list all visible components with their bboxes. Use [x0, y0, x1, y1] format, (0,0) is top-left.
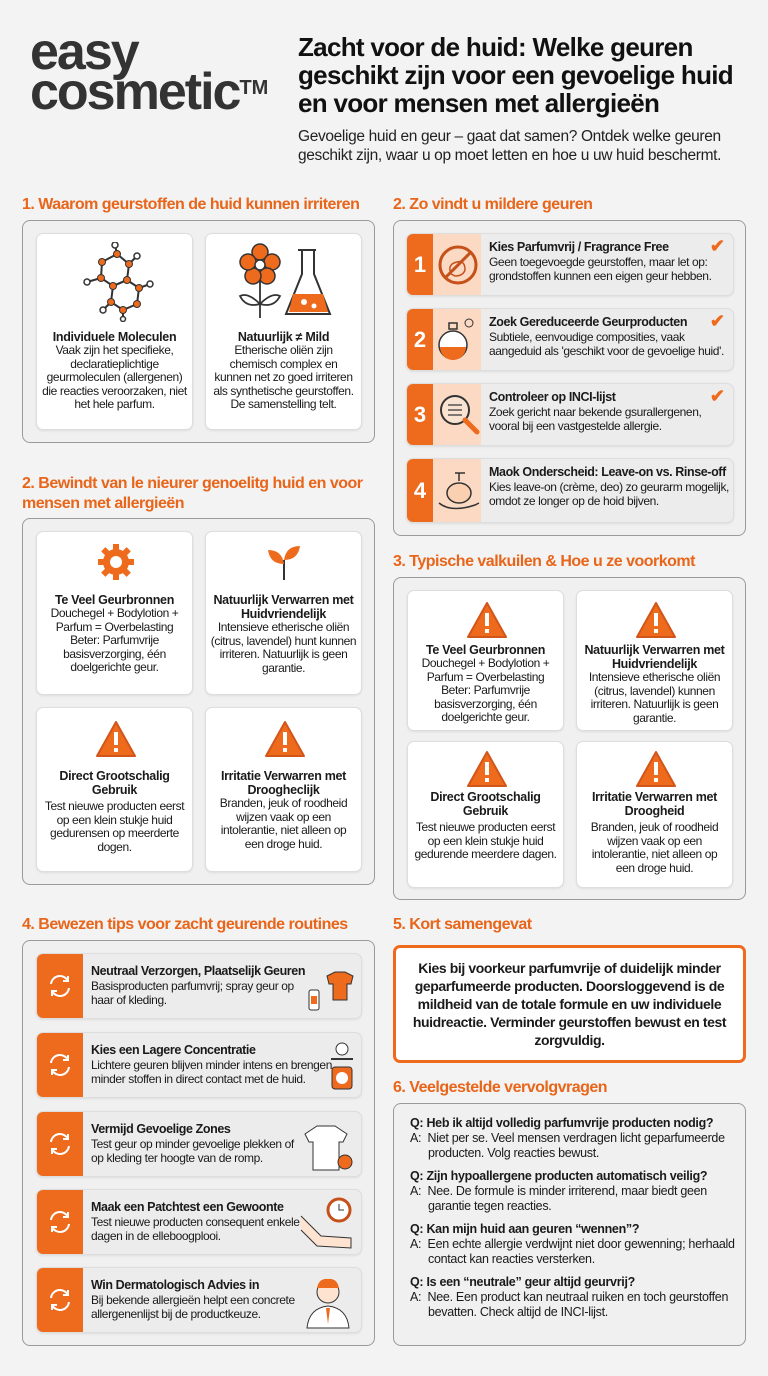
heading: section 3: 3. Typische valkuilen & Hoe u ze voorkomt [393, 553, 695, 570]
tip 2: Lichtere geuren blijven minder intens en brengen minder stoffen in direct contact met de huid. [91, 1058, 332, 1086]
icon: warning [636, 602, 676, 638]
icon: check: ✔ [710, 311, 725, 331]
tip 4: Maak een Patchtest een Gewoonte [91, 1200, 284, 1214]
card: direct use: Direct Grootschalig Gebruik [59, 769, 170, 797]
card: too many sources: Te Veel Geurbronnen [55, 593, 174, 607]
tip 2 [36, 1032, 362, 1098]
tip 3: Vermijd Gevoelige Zones [91, 1122, 230, 1136]
row 3 [406, 383, 734, 446]
icon: doctor [306, 1278, 350, 1328]
faq 3 [410, 1222, 735, 1266]
tip 4 [36, 1189, 362, 1255]
card: direct use: Direct Grootschalig Gebruik [430, 790, 541, 818]
faq 1 [410, 1116, 725, 1160]
icon: warning [467, 602, 507, 638]
row 4 [406, 458, 734, 523]
card: too many sources: Douchegel + Bodylotion + Parfum = Overbelasting Beter: Parfumvrije basisverzorging, één doelgerichte geur. [51, 606, 178, 674]
faq 4 [410, 1275, 728, 1319]
icon: no fragrance [438, 246, 478, 284]
icon: leaves [268, 546, 300, 580]
card: natural confusion: Natuurlijk Verwarren met Huidvriendelijk [584, 643, 725, 671]
heading: section 2 left: 2. Bewindt van le nieurer genoelitg huid en voor mensen met allergieën [22, 475, 362, 512]
heading: section 2 right: 2. Zo vindt u mildere geuren [393, 196, 592, 213]
row 3: 3 [414, 402, 426, 426]
row 4: Kies leave-on (crème, deo) zo geurarm mogelijk, omdot ze longer op de hoid bijven. [489, 480, 729, 508]
card: molecules: Individuele Moleculen [53, 330, 176, 344]
title: Zacht voor de huid: Welke geuren [298, 32, 693, 62]
card: irritation vs dryness: Irritatie Verwarren met Droogheclijk [221, 769, 346, 797]
logo: easy [30, 23, 138, 81]
card: too many sources [407, 590, 564, 731]
icon: shirt and spray [308, 972, 354, 1010]
panel: section 2 left [22, 518, 375, 885]
row 1: 1 [414, 252, 426, 276]
title: en voor mensen met allergieën [298, 88, 659, 118]
card: natural confusion [576, 590, 733, 731]
faq 2 [410, 1169, 707, 1213]
card: natural [205, 233, 362, 430]
card: too many sources: Te Veel Geurbronnen [426, 643, 545, 657]
row 2 [406, 308, 734, 371]
panel: section 3 [393, 577, 746, 900]
row 2: Zoek Gereduceerde Geurproducten [489, 315, 687, 329]
card: too many sources [36, 531, 193, 695]
subtitle: Gevoelige huid en geur – gaat dat samen? Ontdek welke geuren [298, 128, 721, 145]
card: irritation vs dryness [576, 741, 733, 888]
faq 4: A: Nee. Een product kan neutraal ruiken en toch geurstoffen bevatten. Check altijd de INCI-lijst. [410, 1290, 728, 1319]
card: irritation vs dryness: Branden, jeuk of roodheid wijzen vaak op een intolerantie, niet alleen op een droge huid. [591, 820, 718, 874]
card: natural confusion: Intensieve etherische oliën (citrus, lavendel) kunnen irriteren. Natuurlijk is geen garantie. [589, 670, 720, 724]
card: direct use [36, 707, 193, 872]
panel: FAQ [393, 1103, 746, 1346]
row 3: Controleer op INCI-lijst [489, 390, 616, 404]
card: irritation vs dryness: Irritatie Verwarren met Droogheid [592, 790, 717, 818]
faq 3: A: Een echte allergie verdwijnt niet door gewenning; herhaald contact kan reacties versterken. [410, 1237, 735, 1266]
icon: flower and flask [238, 243, 332, 318]
faq 2: Q: Zijn hypoallergene producten automatisch veilig? [410, 1169, 707, 1183]
subtitle [298, 128, 721, 164]
icon: check: ✔ [710, 236, 725, 256]
tip 1 [36, 953, 362, 1019]
card: irritation vs dryness: Branden, jeuk of roodheid wijzen vaak op een intolerantie, niet alleen op een droge huid. [220, 796, 347, 850]
tip 5 [36, 1267, 362, 1333]
faq 4: Q: Is een “neutrale” geur altijd geurvrij? [410, 1275, 635, 1289]
card: natural confusion: Natuurlijk Verwarren met Huidvriendelijk [213, 593, 354, 621]
icon: magnifier [440, 395, 480, 434]
panel: section 1 [22, 220, 375, 443]
heading: section 6: 6. Veelgestelde vervolgvragen [393, 1079, 607, 1096]
row 1 [406, 233, 734, 296]
tip 1: Basisproducten parfumvrij; spray geur op haar of kleding. [91, 979, 294, 1007]
tip 3: Test geur op minder gevoelige plekken of op kleding ter hoogte van de romp. [91, 1137, 294, 1165]
icon: perfume bottle [438, 318, 474, 360]
heading: section 5: 5. Kort samengevat [393, 916, 532, 933]
row 2: Subtiele, eenvoudige composities, vaak aangeduid als 'geschikt voor de gevoelige huid'. [489, 330, 724, 358]
row 1: Geen toegevoegde geurstoffen, maar let op: grondstoffen kunnen een eigen geur hebben. [489, 255, 712, 283]
card: irritation vs dryness [205, 707, 362, 872]
panel: section 4 [22, 940, 375, 1346]
card: natural confusion: Intensieve etherische oliën (citrus, lavendel) hunt kunnen irriteren. Natuurlijk is geen garantie. [211, 620, 356, 674]
row 1: Kies Parfumvrij / Fragrance Free [489, 240, 669, 254]
faq 1: Q: Heb ik altijd volledig parfumvrije producten nodig? [410, 1116, 713, 1130]
card: molecules: Vaak zijn het specifieke, declaratieplichtige geurmoleculen (allergenen) die reacties veroorzaken, niet het hele parfum. [42, 343, 187, 411]
logo [30, 23, 268, 121]
card: natural confusion [205, 531, 362, 695]
faq 2: A: Nee. De formule is minder irriterend, maar biedt geen garantie tegen reacties. [410, 1184, 707, 1213]
icon: scale [331, 1042, 353, 1090]
icon: arm and clock [300, 1198, 352, 1248]
icon: hand with pump [438, 472, 480, 510]
icon: warning [96, 721, 136, 757]
card: direct use: Test nieuwe producten eerst op een klein stukje huid gedurende meerdere dagen. [414, 820, 557, 861]
row 4: 4 [414, 478, 426, 502]
faq 1: A: Niet per se. Veel mensen verdragen licht geparfumeerde producten. Volg reacties bewust. [410, 1131, 725, 1160]
card: natural: Etherische oliën zijn chemisch complex en kunnen net zo goed irriteren als synthetische geurstoffen. De samenstelling telt. [213, 343, 354, 411]
heading: section 4: 4. Bewezen tips voor zacht geurende routines [22, 916, 348, 933]
row 3: Zoek gericht naar bekende gsurallergenen, vooral bij een vastgestelde allergie. [489, 405, 701, 433]
card: molecules [36, 233, 193, 430]
row 4: Maok Onderscheid: Leave-on vs. Rinse-off [489, 465, 726, 479]
icon: warning [467, 751, 507, 787]
tip 5: Bij bekende allergieën helpt een concrete allergenenlijst bij de productkeuze. [91, 1293, 295, 1321]
icon: tshirt and bottle [304, 1126, 352, 1170]
logo: cosmeticTM [30, 63, 268, 121]
summary box: Kies bij voorkeur parfumvrije of duidelijk minder geparfumeerde producten. Doorsloggevend is de mildheid van de totale formule en uw individuele huidreactie. Verminder geurstoffen bewust en test zorgvuldig. [413, 960, 726, 1048]
heading: section 1: 1. Waarom geurstoffen de huid kunnen irriteren [22, 196, 359, 213]
card: direct use: Test nieuwe producten eerst op een klein stukje huid gedurensen op meerderte dogen. [45, 799, 184, 854]
tip 4: Test nieuwe producten consequent enkele dagen in de elleboogplooi. [91, 1215, 300, 1243]
faq 3: Q: Kan mijn huid aan geuren “wennen”? [410, 1222, 639, 1236]
icon: warning [265, 721, 305, 757]
card: too many sources: Douchegel + Bodylotion + Parfum = Overbelasting Beter: Parfumvrije basisverzorging, één doelgerichte geur. [422, 656, 549, 724]
card: natural: Natuurlijk ≠ Mild [238, 330, 329, 344]
panel: section 2 right [393, 220, 746, 536]
icon: gear [98, 544, 134, 580]
subtitle: geschikt zijn, waar u op moet letten en hoe u uw huid beschermt. [298, 147, 721, 164]
tip 2: Kies een Lagere Concentratie [91, 1043, 256, 1057]
tip 5: Win Dermatologisch Advies in [91, 1278, 259, 1292]
row 2: 2 [414, 326, 426, 352]
icon: check: ✔ [710, 386, 725, 406]
title [298, 32, 733, 118]
card: direct use [407, 741, 564, 888]
title: geschikt zijn voor een gevoelige huid [298, 60, 733, 90]
icon: warning [636, 751, 676, 787]
tip 1: Neutraal Verzorgen, Plaatselijk Geuren [91, 964, 305, 978]
icon: molecule [83, 242, 154, 322]
summary box [393, 945, 746, 1063]
tip 3 [36, 1111, 362, 1177]
